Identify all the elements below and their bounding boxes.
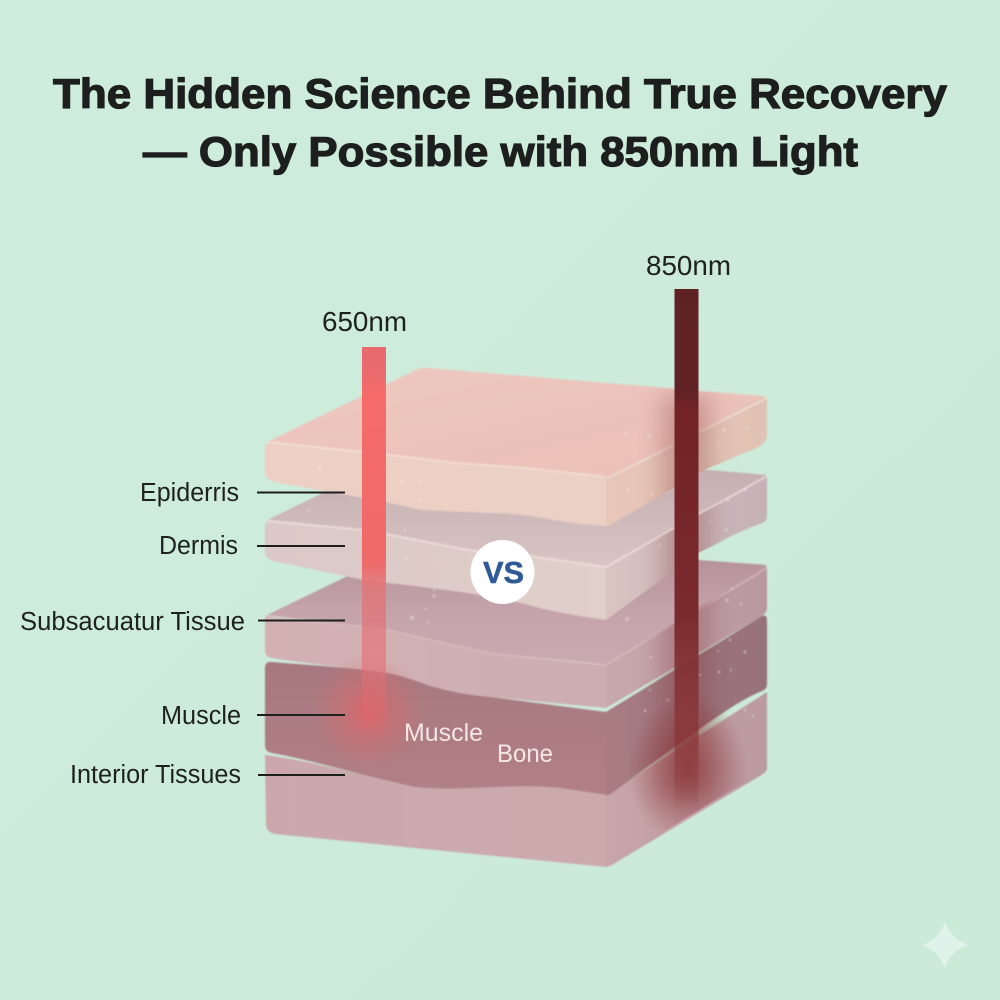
label: 850nm: 850nm — [646, 250, 731, 281]
layer: dermis — [265, 445, 767, 620]
layer label: Epiderris: Epiderris — [140, 479, 239, 507]
layer: subcutaneous tissue — [265, 540, 767, 708]
leader line: Dermis — [257, 545, 345, 547]
beam: 850nm — [674, 289, 698, 810]
inner label: Muscle: Muscle — [404, 719, 483, 747]
haze around 850nm beam — [662, 395, 710, 795]
title — [53, 70, 948, 175]
leader line: Epiderris — [257, 492, 345, 494]
specks — [308, 428, 754, 717]
beam: 650nm — [362, 347, 386, 740]
leader line: Interior Tissues — [258, 774, 345, 776]
leader line: Muscle — [257, 714, 345, 716]
layered tissue diagram — [265, 368, 767, 867]
layer: epidermis — [265, 368, 767, 526]
glow: 850nm deep penetration — [634, 710, 742, 832]
layer: muscle — [265, 616, 767, 795]
layer: interior tissues — [265, 692, 767, 867]
inner label: Bone: Bone — [497, 740, 553, 768]
glow: 650nm absorption in muscle — [323, 663, 413, 758]
title: — Only Possible with 850nm Light — [143, 128, 858, 175]
layer label: Muscle: Muscle — [161, 702, 241, 730]
layer label: Subsacuatur Tissue: Subsacuatur Tissue — [20, 608, 245, 636]
leader line: Subsacuatur Tissue — [258, 620, 345, 622]
VS badge — [470, 540, 534, 604]
label: 650nm: 650nm — [322, 306, 407, 337]
title: The Hidden Science Behind True Recovery — [53, 70, 948, 117]
VS badge: VS — [483, 555, 524, 590]
icon: sparkle watermark — [922, 922, 968, 968]
layer label: Dermis: Dermis — [159, 532, 238, 560]
layer label: Interior Tissues: Interior Tissues — [70, 761, 241, 789]
